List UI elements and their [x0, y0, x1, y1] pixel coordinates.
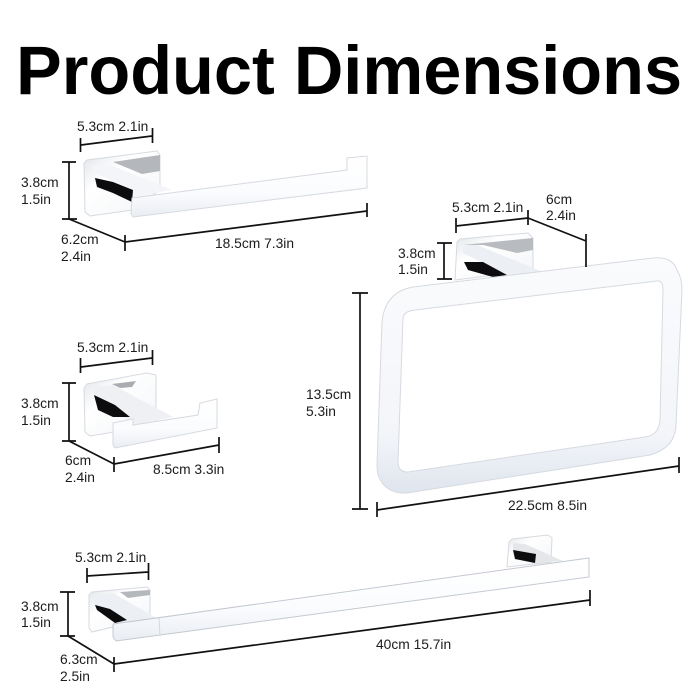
product image: paper holder — [84, 151, 367, 217]
dimension: plate height: 1.5in — [398, 262, 428, 277]
dimension: plate height: 3.8cm — [21, 175, 59, 190]
dimension: length: 18.5cm 7.3in — [215, 236, 294, 251]
dimension: depth — [528, 192, 586, 267]
product image: towel bar — [89, 535, 589, 641]
dimension: ring width: 22.5cm 8.5in — [508, 498, 587, 513]
dimension: depth: 2.4in — [546, 208, 576, 223]
dimension: length — [125, 203, 367, 251]
dimension: plate width: 5.3cm 2.1in — [75, 550, 146, 565]
dimension: plate height — [21, 383, 76, 441]
dimension: depth: 6cm — [65, 453, 91, 468]
panel: double hook — [21, 340, 224, 485]
dimension: plate height: 1.5in — [21, 413, 51, 428]
dimension: depth — [61, 219, 125, 264]
dimension: depth: 6.3cm — [60, 652, 98, 667]
dimension: plate width — [75, 550, 148, 583]
dimension: plate height: 1.5in — [21, 615, 51, 630]
dimension: plate height — [398, 243, 452, 279]
dimension: ring height — [306, 293, 368, 509]
dimension: plate width: 5.3cm 2.1in — [452, 200, 523, 215]
dimension: plate height: 1.5in — [21, 192, 51, 207]
dimension: length: 8.5cm 3.3in — [153, 462, 224, 477]
dimension: plate height — [21, 162, 77, 219]
dimension: plate width — [452, 200, 528, 233]
dimension: ring height: 13.5cm — [306, 387, 351, 402]
panel: towel ring — [306, 192, 682, 517]
panel: toilet paper holder — [21, 119, 367, 264]
dimension: plate width — [77, 340, 152, 373]
panel: towel bar — [21, 535, 590, 684]
dimension: plate height — [21, 592, 75, 636]
dimension: length: 40cm 15.7in — [376, 637, 451, 652]
dimension: length — [114, 590, 590, 664]
dimension: plate width: 5.3cm 2.1in — [77, 119, 148, 134]
dimension: depth — [60, 636, 114, 684]
dimension: depth: 2.4in — [65, 470, 95, 485]
title: Product Dimensions — [16, 32, 682, 109]
dimension: depth: 2.4in — [61, 249, 91, 264]
dimension: plate width: 5.3cm 2.1in — [77, 340, 148, 355]
dimension: plate width — [77, 119, 152, 152]
dimension: depth: 2.5in — [60, 669, 90, 684]
dimension: plate height: 3.8cm — [21, 396, 59, 411]
dimension: depth — [65, 441, 114, 485]
dimension: ring width — [377, 457, 679, 517]
dimension: length — [114, 437, 224, 477]
dimension: depth: 6cm — [546, 192, 572, 207]
dimension: plate height: 3.8cm — [398, 246, 436, 261]
product image: hook — [84, 373, 217, 448]
dimension: ring height: 5.3in — [306, 404, 336, 419]
dimension: depth: 6.2cm — [61, 232, 99, 247]
dimension: plate height: 3.8cm — [21, 599, 59, 614]
product image: towel ring — [377, 233, 682, 493]
